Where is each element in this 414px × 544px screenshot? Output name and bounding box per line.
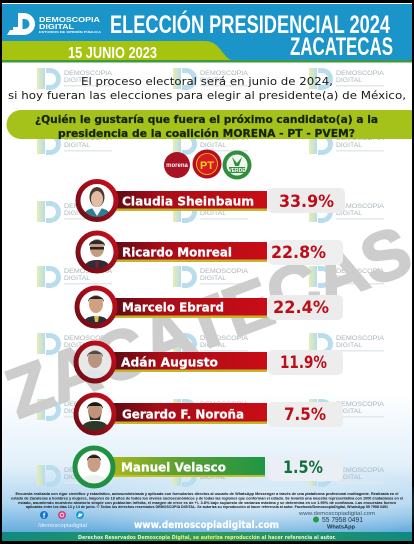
portrait [81, 350, 109, 384]
large diagonal watermark: ZACATECAS: ZACATECAS [0, 211, 414, 433]
methodology note [11, 492, 403, 509]
date ribbon [2, 41, 236, 61]
footer bar [2, 532, 412, 541]
candidate row: Marcelo Ebrard: 22.4% [273, 298, 329, 318]
candidate row: Marcelo Ebrard: Marcelo Ebrard [122, 300, 224, 314]
social icons [38, 511, 87, 529]
candidate row: Adán Augusto: 11.9% [280, 353, 327, 373]
question band: ¿Quién le gustaría que fuera el próximo candidato(a) a la [35, 113, 378, 126]
contact: 55 7958 0491 [322, 515, 363, 524]
candidate row: Adán Augusto: Adán Augusto [121, 354, 218, 370]
footer bar: Derechos Reservados Demoscopia Digital, se autoriza reproducción al hacer referencia al autor. [78, 534, 336, 541]
intro text: El proceso electoral será en junio de 2024, [81, 76, 333, 88]
methodology note: aplicadas entre los días 13 y 14 de junio. © Todos los derechos reservados DEMOSCOPIA DIGITAL. Se autoriza su reproducción al hacer referencia al autor. Facebook/DemoscopiaDigital, WhatsApp 55 7958 0491 [26, 505, 388, 509]
portrait [81, 402, 109, 435]
question band: presidencia de la coalición MORENA - PT - PVEM? [58, 127, 355, 140]
social icons: /demoscopiadigital [38, 523, 87, 529]
logo: Demoscopia Digital [7, 13, 102, 35]
candidate row: Marcelo Ebrard [77, 288, 343, 328]
candidate row: Claudia Sheinbaum: Claudia Sheinbaum [122, 194, 254, 208]
candidate row: Ricardo Monreal: Ricardo Monreal [122, 244, 232, 260]
icon: Verde: VERDE [228, 168, 246, 174]
candidate row: Ricardo Monreal [78, 233, 343, 273]
methodology note: Encuesta realizada con rigor científico y estadístico, autosuministrada y aplicada con formularios directos al usuario de WhatsApp Messenger a través de una plataforma profesional multiagente. Realizada en el [16, 492, 398, 496]
methodology note: estado, asumiendo muestreo aleatorio simple con población infinita, el margen de error es de +/- 3.8% bajo supuesto de varianza máxima y se determina en un 1.95% de confianza. Las encuestas fueron [18, 501, 397, 505]
portrait [81, 454, 107, 487]
icon: twitter [76, 511, 84, 519]
candidate row: Claudia Sheinbaum: 33.9% [279, 192, 334, 212]
intro text [8, 76, 406, 102]
logo: Demoscopia Digital: ESTUDIOS DE OPINIÓN PÚBLICA [39, 29, 102, 34]
party logos [164, 150, 252, 180]
intro text: si hoy fueran las elecciones para elegir al presidente(a) de México, [8, 90, 406, 102]
candidate row: Gerardo F. Noroña: 7.5% [284, 405, 326, 425]
title [110, 9, 393, 61]
candidate row: Gerardo F. Noroña [76, 395, 343, 435]
header band [2, 4, 412, 62]
contact: www.demoscopiadigital.com [298, 511, 375, 517]
candidate row: Claudia Sheinbaum [78, 182, 345, 222]
icon: whatsapp [313, 516, 319, 522]
candidate row: Manuel Velasco [75, 448, 343, 487]
logo: Demoscopia Digital: DEMOSCOPIA [39, 15, 101, 24]
portrait [83, 187, 111, 222]
icon: facebook: f [43, 513, 46, 520]
methodology note: estado de Zacatecas a hombres y mujeres, mayores de 18 años de todos los niveles socioeconómicos y de todas las regiones que conforman el estado. Se levantó una muestra representativa con 1000 ciudadanos en el [11, 496, 403, 500]
icon: morena: morena [166, 163, 188, 169]
website: www.demoscopiadigital.com [134, 520, 279, 531]
candidate row: Manuel Velasco: Manuel Velasco [121, 460, 226, 474]
candidate row: Gerardo F. Noroña: Gerardo F. Noroña [122, 406, 244, 422]
candidate row: Ricardo Monreal: 22.8% [271, 243, 326, 263]
contact [298, 511, 375, 530]
question band [7, 110, 412, 140]
date: 15 JUNIO 2023 [68, 45, 157, 62]
portrait [83, 295, 109, 328]
watermark grid: Demoscopia Digital [37, 68, 385, 487]
icon: PT: PT [200, 160, 214, 172]
candidate row: Manuel Velasco: 1.5% [283, 458, 323, 478]
icon: instagram [58, 511, 66, 519]
portrait [84, 239, 110, 273]
candidate row: Adán Augusto [76, 343, 343, 384]
contact: WhatsApp [327, 524, 355, 530]
logo: Demoscopia Digital: DIGITAL [39, 22, 74, 31]
